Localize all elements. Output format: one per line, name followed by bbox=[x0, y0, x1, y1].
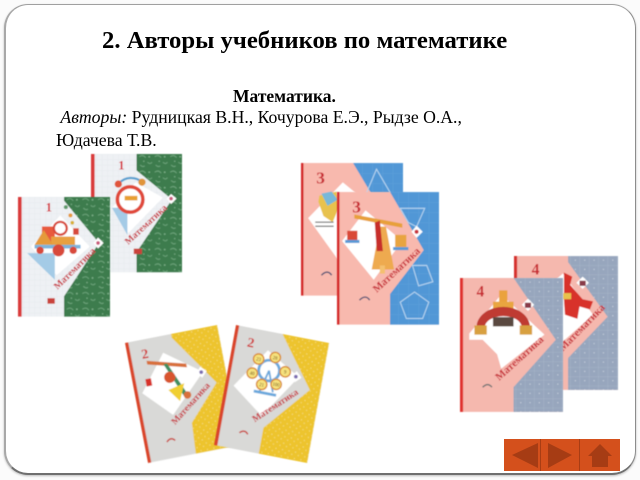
book: grade 3 part 2: 3 bbox=[352, 197, 361, 216]
icon: back arrow bbox=[512, 443, 538, 468]
book: grade 2 part 2 bbox=[214, 325, 329, 463]
book: grade 4 part 2: 4 bbox=[532, 262, 540, 279]
book: grade 4 part 1: Математика bbox=[493, 333, 547, 383]
book: grade 1 part 2 bbox=[91, 154, 182, 272]
book: grade 1 part 1: 1 bbox=[46, 201, 52, 215]
book: grade 2 part 2: 2 bbox=[246, 334, 256, 351]
book: grade 1 part 1: Математика bbox=[52, 246, 98, 292]
book: grade 2 part 2: 100 bbox=[272, 383, 280, 389]
book: grade 3 part 2: Математика bbox=[371, 245, 423, 295]
book: grade 2 part 2: Математика bbox=[251, 388, 301, 425]
book: grade 4 part 2 bbox=[514, 256, 618, 390]
book: grade 1 part 2: Математика bbox=[123, 202, 170, 247]
book: grade 2 part 2: 40 bbox=[249, 372, 255, 377]
book: grade 4 part 2: Математика bbox=[556, 301, 608, 354]
book: grade 1 part 1 bbox=[18, 197, 110, 317]
book: grade 2 part 2: 21 bbox=[259, 383, 265, 389]
book: grade 3 part 1: 3 bbox=[316, 168, 325, 187]
navigation buttons bbox=[504, 439, 620, 471]
authors text bbox=[56, 107, 462, 150]
book: grade 2 part 1: Математика bbox=[170, 381, 213, 427]
authors text: Юдачева Т.В. bbox=[56, 130, 157, 150]
title: 2. Авторы учебников по математике bbox=[102, 27, 507, 54]
book: grade 3 part 2 bbox=[337, 192, 439, 325]
book: grade 1 part 2: 1 bbox=[118, 158, 125, 172]
icon: forward arrow bbox=[548, 443, 572, 468]
book: grade 4 part 1 bbox=[460, 278, 563, 412]
book: grade 2 part 2: 9 bbox=[283, 370, 287, 376]
book: grade 2 part 2: 23 bbox=[256, 357, 262, 363]
book: grade 3 part 1 bbox=[301, 163, 403, 296]
book: grade 4 part 1: 4 bbox=[476, 284, 484, 301]
authors text: Авторы: Рудницкая В.Н., Кочурова Е.Э., Рыдзе О.А., bbox=[60, 107, 462, 127]
book: grade 2 part 1: 2 bbox=[140, 346, 150, 363]
icon: home bbox=[588, 444, 612, 467]
subtitle: Математика. bbox=[233, 86, 336, 106]
book: grade 2 part 2: 28 bbox=[272, 356, 278, 362]
book: grade 2 part 1 bbox=[125, 325, 240, 463]
